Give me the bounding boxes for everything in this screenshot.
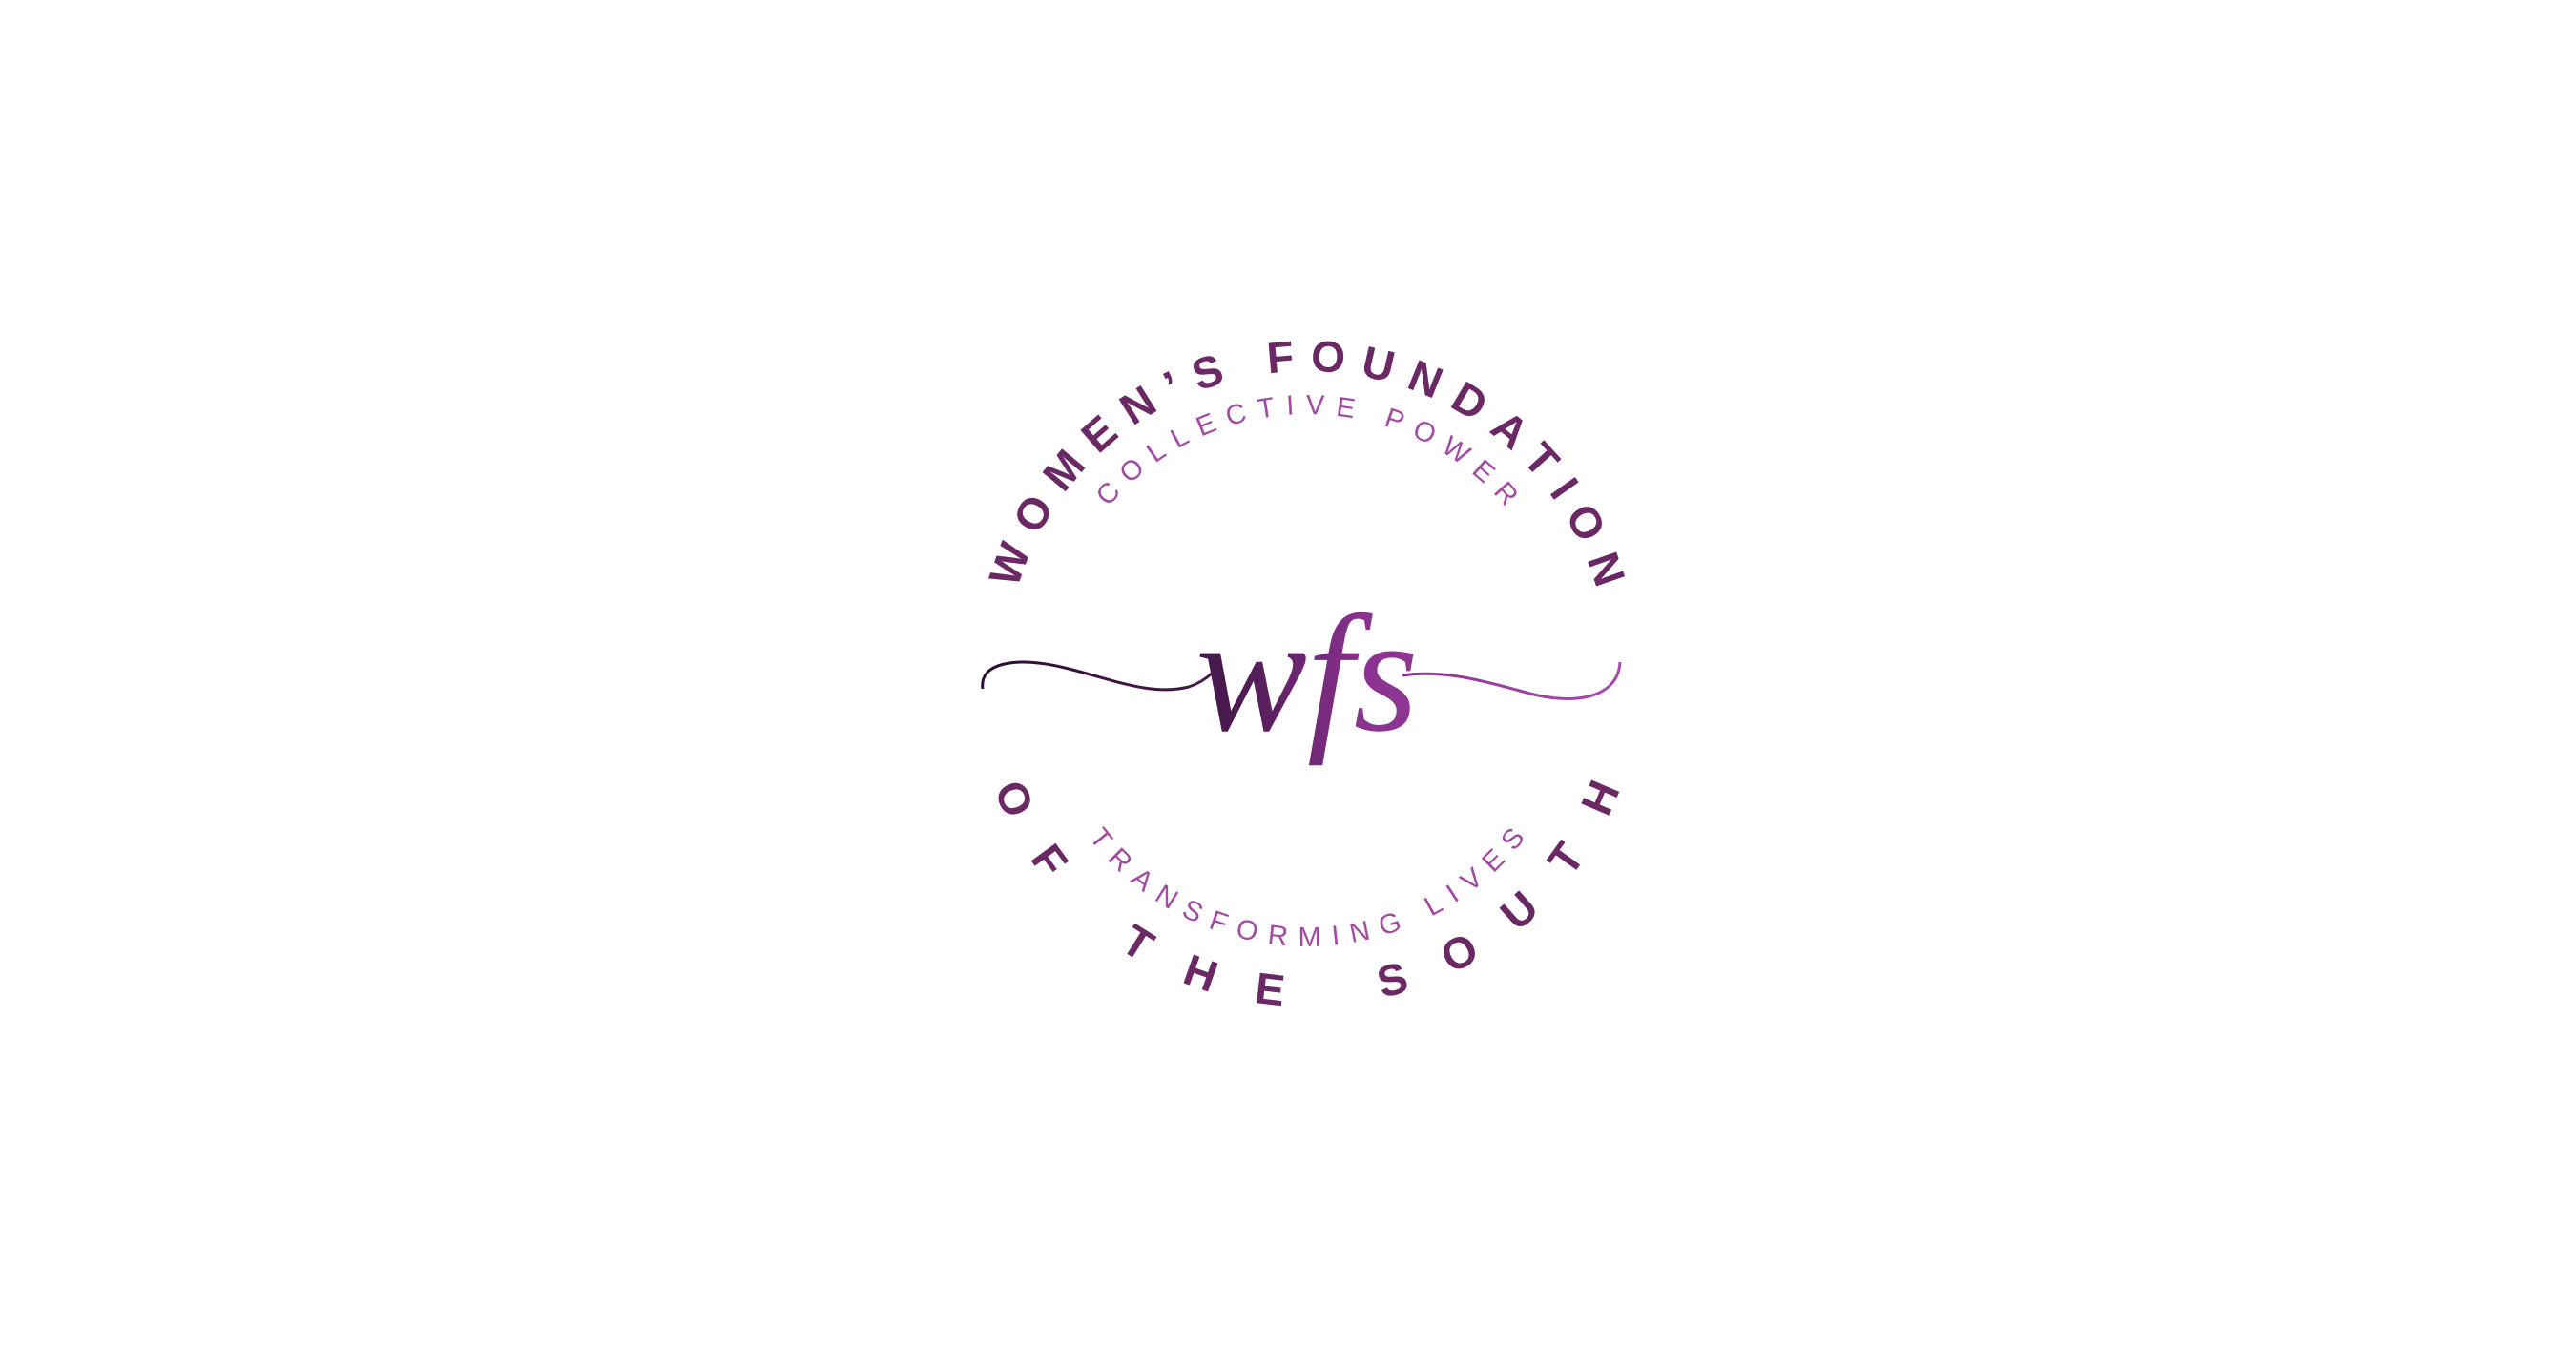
monogram: wfs script with swash: [983, 581, 1620, 766]
outer text: WOMEN'S FOUNDATION: WOMEN’S FOUNDATION: [988, 342, 1625, 586]
inner text: TRANSFORMING LIVES: TRANSFORMING LIVES: [1093, 826, 1523, 946]
monogram: wfs script with swash: wfs: [1195, 581, 1419, 766]
inner text: COLLECTIVE POWER: COLLECTIVE POWER: [1098, 395, 1517, 507]
outer text: OF THE SOUTH: OF THE SOUTH: [998, 780, 1620, 1006]
